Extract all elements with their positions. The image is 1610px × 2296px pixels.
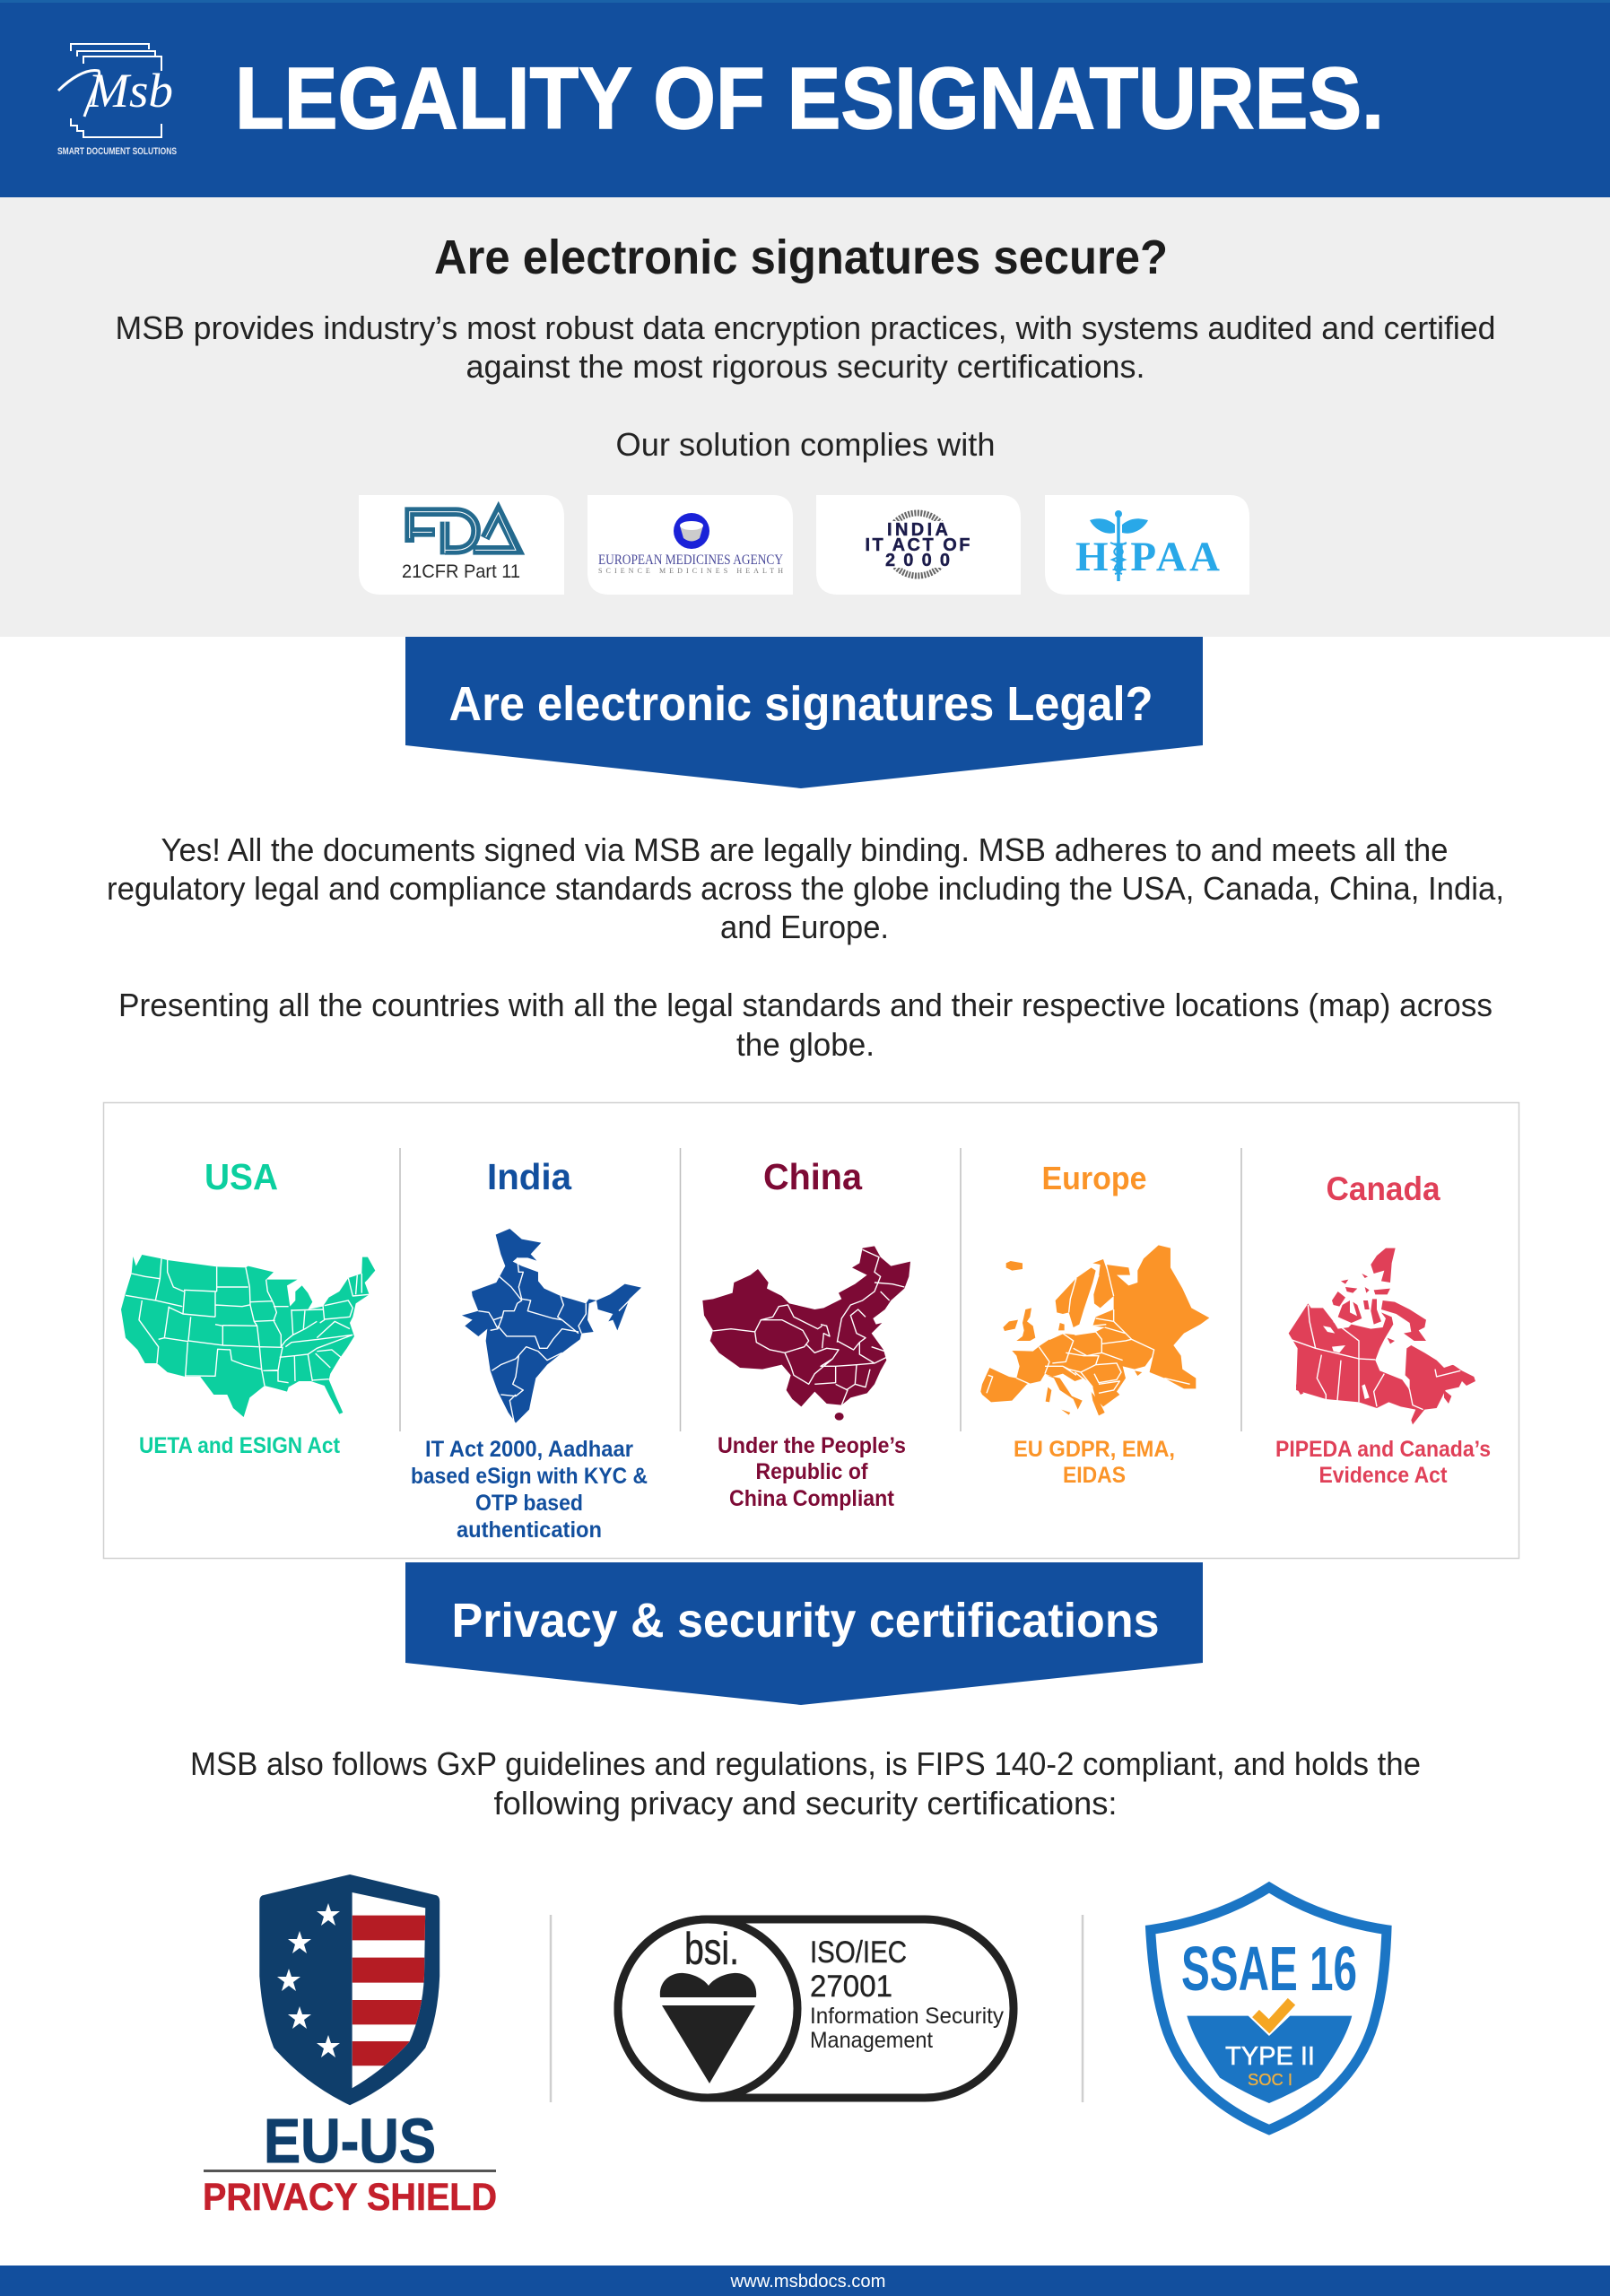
banner: privacy and security certifications: Privacy & security certifications bbox=[452, 1594, 1159, 1648]
text block: encryption practices bbox=[115, 309, 1496, 385]
label: Europe standard: EIDAS bbox=[1063, 1463, 1126, 1488]
label: Canada standard: Evidence Act bbox=[1318, 1463, 1448, 1488]
text block: encryption practices: MSB provides industry’s most robust data encryption practices, with systems audited and certified bbox=[115, 309, 1496, 346]
label: India standard: authentication bbox=[457, 1518, 602, 1543]
header band bbox=[0, 0, 1610, 197]
logo card: FDA bbox=[359, 495, 564, 595]
text block: legally binding: regulatory legal and compliance standards across the globe including the USA, Canada, China, India, bbox=[107, 870, 1504, 907]
panel: country legal standards bbox=[104, 1103, 1519, 1559]
logo card: India IT Act: 2000 bbox=[885, 551, 950, 570]
label: China standard bbox=[718, 1433, 906, 1511]
logo card: FDA: 21CFR Part 11 bbox=[402, 561, 520, 582]
label: India standard: OTP based bbox=[475, 1491, 583, 1516]
label: Europe standard bbox=[1014, 1437, 1175, 1488]
column: India bbox=[411, 1156, 648, 1543]
badge: EU-US Privacy Shield: EU-US bbox=[264, 2106, 436, 2176]
map: China bbox=[702, 1246, 910, 1421]
label: China standard: China Compliant bbox=[729, 1486, 895, 1511]
label: Canada standard bbox=[1275, 1437, 1491, 1488]
icon: shield bbox=[259, 1874, 439, 2105]
badge: BSI ISO/IEC 27001: 27001 bbox=[810, 1970, 892, 2004]
logo card: HIPAA bbox=[1045, 495, 1249, 595]
badge: SSAE 16 Type II: SSAE 16 bbox=[1181, 1934, 1357, 2004]
logo card: European Medicines Agency bbox=[587, 495, 793, 595]
text: complies with: Our solution complies with bbox=[615, 426, 996, 463]
map: India bbox=[462, 1229, 641, 1423]
heading: secure: Are electronic signatures secure? bbox=[434, 230, 1168, 284]
icon: MSB logo bbox=[57, 44, 177, 157]
badge: EU-US Privacy Shield bbox=[203, 1874, 497, 2219]
column: Canada bbox=[1275, 1170, 1491, 1488]
title: LEGALITY OF ESIGNATURES. bbox=[235, 49, 1384, 147]
text block: legally binding bbox=[107, 831, 1504, 945]
text block: legally binding: Yes! All the documents signed via MSB are legally binding. MSB adheres to and meets all the bbox=[161, 831, 1448, 868]
logo card: HIPAA: HIPAA bbox=[1075, 534, 1220, 580]
label: China standard: Under the People’s bbox=[718, 1433, 906, 1458]
text block: GxP and FIPS compliance: MSB also follows GxP guidelines and regulations, is FIPS 140-2 compliant, and holds the bbox=[190, 1745, 1421, 1782]
heading: Europe: Europe bbox=[1042, 1160, 1146, 1196]
column: China bbox=[702, 1156, 910, 1511]
heading: India: India bbox=[487, 1156, 572, 1197]
badge: BSI ISO/IEC 27001 bbox=[618, 1919, 1014, 2098]
label: USA standard: UETA and ESIGN Act bbox=[139, 1433, 341, 1458]
badge: EU-US Privacy Shield: PRIVACY SHIELD bbox=[203, 2176, 497, 2219]
label: Canada standard: PIPEDA and Canada’s bbox=[1275, 1437, 1491, 1462]
column: Europe bbox=[980, 1160, 1209, 1488]
text block: GxP and FIPS compliance: following privacy and security certifications: bbox=[493, 1785, 1118, 1822]
logo card: European Medicines Agency: SCIENCE MEDICINES HEALTH bbox=[598, 567, 783, 575]
badge: SSAE 16 Type II: SOC I bbox=[1248, 2071, 1292, 2089]
map: USA bbox=[121, 1255, 375, 1417]
footer bbox=[0, 2266, 1610, 2296]
logo card: India IT Act: INDIA bbox=[887, 520, 948, 540]
label: India standard: based eSign with KYC & bbox=[411, 1464, 648, 1489]
text block: presenting countries bbox=[118, 987, 1493, 1063]
badge: SSAE 16 Type II: TYPE II bbox=[1225, 2042, 1315, 2071]
icon: BSI kitemark heart bbox=[660, 1973, 756, 2083]
heading: China: China bbox=[763, 1156, 863, 1197]
label: India standard: IT Act 2000, Aadhaar bbox=[425, 1437, 633, 1462]
text block: presenting countries: the globe. bbox=[736, 1026, 875, 1063]
banner: privacy and security certifications bbox=[405, 1562, 1203, 1705]
column: USA bbox=[121, 1156, 375, 1458]
panel: are electronic signatures secure bbox=[0, 197, 1610, 637]
text block: legally binding: and Europe. bbox=[720, 909, 889, 945]
badge: BSI ISO/IEC 27001: bsi. bbox=[684, 1924, 739, 1974]
text block: encryption practices: against the most rigorous security certifications. bbox=[466, 348, 1144, 385]
badge: BSI ISO/IEC 27001: Management bbox=[810, 2028, 933, 2053]
badge: BSI ISO/IEC 27001: Information Security bbox=[810, 2004, 1004, 2029]
icon: MSB logo: SMART DOCUMENT SOLUTIONS bbox=[57, 146, 177, 157]
banner: are electronic signatures legal: Are electronic signatures Legal? bbox=[448, 677, 1153, 731]
text block: GxP and FIPS compliance bbox=[190, 1745, 1421, 1822]
badge: BSI ISO/IEC 27001: ISO/IEC bbox=[810, 1935, 907, 1970]
logo card: European Medicines Agency: EUROPEAN MEDICINES AGENCY bbox=[598, 552, 783, 568]
logo card: India IT Act: IT ACT OF bbox=[865, 535, 970, 555]
icon: MSB logo: Msb bbox=[87, 64, 173, 117]
heading: Canada: Canada bbox=[1326, 1170, 1440, 1207]
label: Europe standard: EU GDPR, EMA, bbox=[1014, 1437, 1175, 1462]
map: Canada bbox=[1289, 1248, 1475, 1424]
heading: USA: USA bbox=[205, 1156, 278, 1197]
map: Europe bbox=[980, 1245, 1209, 1415]
label: China standard: Republic of bbox=[755, 1459, 868, 1484]
banner: are electronic signatures legal bbox=[405, 637, 1203, 788]
footer: www.msbdocs.com bbox=[729, 2272, 886, 2292]
label: India standard bbox=[411, 1437, 648, 1543]
text block: presenting countries: Presenting all the countries with all the legal standards and their respective locations (map) across bbox=[118, 987, 1493, 1023]
logo card: India IT Act bbox=[816, 495, 1021, 595]
badge: SSAE 16 Type II bbox=[1151, 1887, 1387, 2130]
